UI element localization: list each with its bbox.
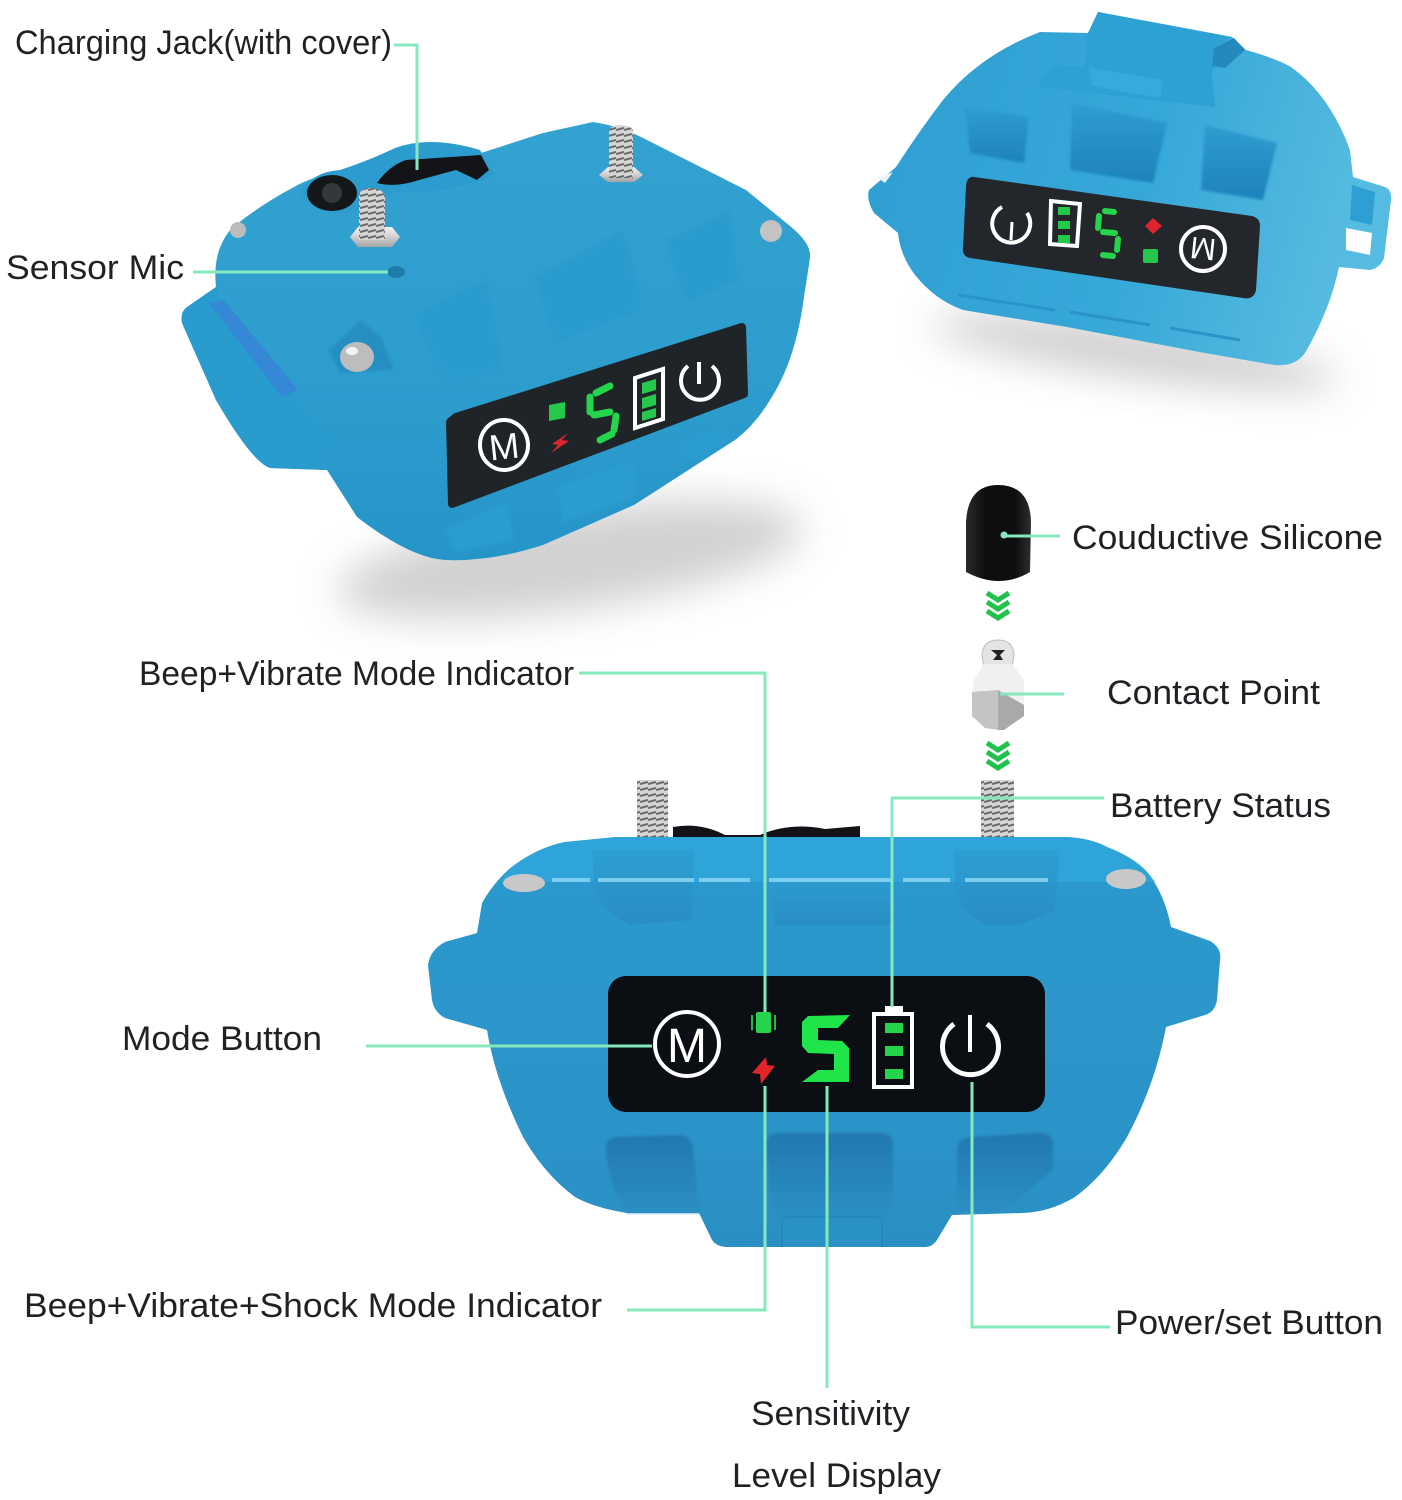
leader: sensitivity	[826, 1086, 828, 1388]
label: battery status: Battery Status	[1110, 787, 1331, 825]
leader lines	[193, 45, 1110, 1388]
ribs	[965, 103, 1277, 200]
leader: sensor mic	[193, 270, 388, 274]
leader: power button	[972, 1082, 1110, 1327]
device: angled top-right collar receiver	[868, 12, 1391, 404]
mode button icon	[478, 418, 530, 472]
leader: battery	[892, 798, 1104, 1007]
mode button icon	[1181, 227, 1225, 271]
icon: conductive silicone cap	[966, 485, 1031, 581]
charging jack with cover	[300, 142, 495, 213]
leader: mode button	[366, 1044, 652, 1048]
top ribs	[415, 210, 738, 552]
display panel: top-right device	[963, 177, 1260, 298]
label: contact point: Contact Point	[1107, 674, 1321, 712]
icon: down chevrons upper	[987, 593, 1009, 618]
label: level display: Level Display	[732, 1457, 941, 1495]
mode button icon: M	[667, 1020, 707, 1073]
icon: down chevrons lower	[987, 743, 1009, 768]
leader: charging jack	[394, 45, 417, 170]
display panel: top-left device	[450, 327, 744, 504]
screws and posts: top-left device	[230, 125, 782, 372]
icon: contact point	[972, 640, 1024, 730]
mode button icon: M	[487, 425, 521, 468]
label: conductive silicone: Couductive Silicone	[1072, 519, 1383, 557]
label: charging jack: Charging Jack(with cover)	[15, 24, 392, 62]
label: sensor mic: Sensor Mic	[6, 249, 184, 287]
label: sensitivity: Sensitivity	[751, 1395, 910, 1433]
leader: beep vibrate	[579, 673, 765, 1012]
label: mode button: Mode Button	[122, 1020, 322, 1058]
display panel: front device	[608, 976, 1045, 1112]
leader: silicone	[1005, 534, 1060, 538]
top strap	[1039, 12, 1245, 107]
mode button icon	[655, 1012, 719, 1076]
label: power set button: Power/set Button	[1115, 1304, 1383, 1342]
device: angled top-left collar receiver	[182, 122, 810, 642]
label: beep vibrate shock mode indicator: Beep+Vibrate+Shock Mode Indicator	[24, 1287, 602, 1325]
leader: contact point	[1000, 692, 1064, 696]
leader: shock mode	[627, 1086, 765, 1310]
device: front view collar receiver	[428, 780, 1220, 1247]
mode button icon: M	[1188, 230, 1218, 267]
label: beep vibrate mode indicator: Beep+Vibrate Mode Indicator	[139, 655, 574, 693]
